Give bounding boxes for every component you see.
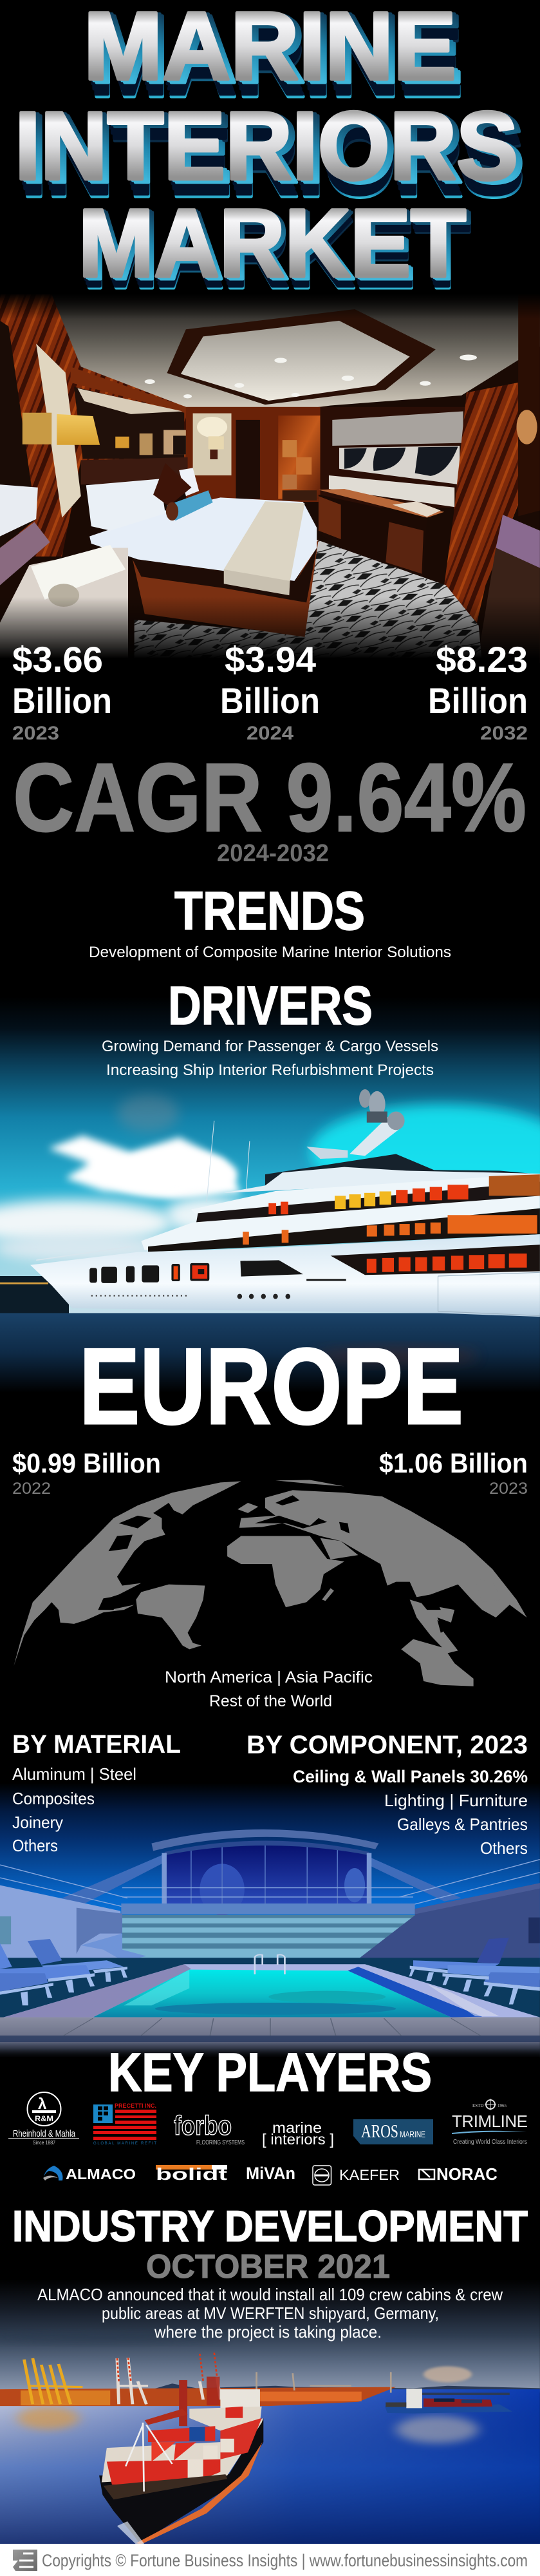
logo: Trimline: TRIMLINE — [452, 2112, 528, 2131]
stat: 2024 market size: $3.94 — [225, 639, 316, 680]
logo: Marine Interiors: [ interiors ] — [262, 2131, 334, 2148]
title line: INTERIORS: INTERIORS — [21, 106, 524, 215]
logo: Rheinhold & Mahla — [8, 2092, 79, 2146]
by component list: Others — [480, 1838, 528, 1858]
by component list: BY COMPONENT, 2023 — [247, 1731, 528, 1759]
title line: INTERIORS: INTERIORS — [19, 93, 522, 201]
stat: 2032 market size: $8.23 — [436, 639, 528, 680]
top fade band on the pool illustration — [0, 2048, 540, 2061]
driver list: Growing Demand for Passenger & Cargo Vessels — [102, 1038, 438, 1055]
Europe 2022 value — [12, 1448, 161, 1498]
stat: 2023 market size: $3.66 — [12, 639, 103, 680]
heading: TRENDS: TRENDS — [174, 881, 365, 941]
title line: MARKET: MARKET — [79, 189, 466, 297]
stat: 2024 market size — [220, 639, 320, 744]
by material list: Others — [12, 1836, 58, 1855]
by material list: Composites — [12, 1789, 95, 1808]
photo: container ships in port — [0, 2216, 540, 2544]
logo: Norac: NORAC — [436, 2164, 498, 2184]
title line: INTERIORS: INTERIORS — [17, 96, 521, 204]
lounge chairs left — [0, 1939, 127, 2005]
driver list: Increasing Ship Interior Refurbishment Projects — [106, 1062, 434, 1079]
by component list: Ceiling & Wall Panels 30.26% — [293, 1767, 528, 1786]
Europe 2023 value: 2023 — [489, 1480, 528, 1498]
lounge chairs right — [409, 1938, 540, 2005]
driver list — [102, 1038, 438, 1079]
Europe 2022 value: 2022 — [12, 1480, 51, 1498]
title line: MARKET: MARKET — [81, 196, 469, 304]
by material list: BY MATERIAL — [12, 1730, 181, 1759]
cranes — [24, 2352, 391, 2404]
stat: 2032 market size: 2032 — [480, 723, 528, 744]
main container ship — [99, 2377, 263, 2544]
logo: Precetti: PRECETTI INC. — [115, 2103, 156, 2109]
logo: Marine Interiors — [262, 2119, 334, 2148]
sea — [0, 1313, 540, 1393]
logo: Bolidt — [156, 2164, 228, 2184]
title line: MARKET: MARKET — [82, 198, 470, 307]
heading: DRIVERS: DRIVERS — [168, 975, 373, 1036]
stat: 2032 market size — [428, 639, 528, 744]
logo: Trimline — [452, 2099, 528, 2146]
heading: KEY PLAYERS: KEY PLAYERS — [108, 2042, 432, 2103]
title line: INTERIORS: INTERIORS — [21, 95, 525, 203]
yacht — [30, 1089, 540, 1317]
by material list: Joinery — [12, 1813, 63, 1832]
title line: MARKET: MARKET — [83, 200, 470, 309]
illustration: cruise ship pool deck at night — [0, 1726, 540, 2061]
logo: AROS Marine: MARINE — [400, 2129, 425, 2139]
development description: where the project is taking place. — [154, 2322, 382, 2342]
pool — [0, 1964, 540, 2018]
title line: INTERIORS: INTERIORS — [19, 101, 522, 209]
photo: yacht bedroom — [0, 294, 540, 670]
logo: AROS Marine: AROS — [361, 2122, 398, 2142]
by material list: Aluminum | Steel — [12, 1764, 136, 1784]
by component list — [247, 1731, 528, 1858]
development description: public areas at MV WERFTEN shipyard, Germany, — [102, 2304, 439, 2323]
title — [15, 0, 525, 309]
stat: 2024 market size: 2024 — [247, 723, 293, 744]
stat: 2024 market size: Billion — [220, 680, 320, 721]
trend text: Development of Composite Marine Interior Solutions — [89, 944, 451, 961]
title line: MARINE: MARINE — [90, 9, 463, 117]
logo: Trimline: 1965 — [498, 2103, 507, 2108]
stat: 2032 market size: Billion — [428, 680, 528, 721]
photo: superyacht at dusk — [0, 997, 540, 1393]
logo: Rheinhold & Mahla: Since 1887 — [33, 2140, 55, 2146]
logo: Trimline: ESTD — [472, 2103, 484, 2108]
globe map — [14, 1480, 527, 1686]
Europe 2022 value: $0.99 Billion — [12, 1448, 161, 1479]
footer logo — [13, 2550, 37, 2571]
by component list: Galleys & Pantries — [397, 1815, 528, 1834]
logo: Kaefer: KAEFER — [339, 2167, 400, 2183]
stat: 2023 market size: Billion — [12, 680, 112, 721]
title line: MARKET: MARKET — [81, 190, 469, 298]
CAGR figure: 2024-2032 — [217, 840, 329, 867]
logo: Forbo: forbo — [174, 2110, 232, 2141]
other regions list: Rest of the World — [209, 1692, 332, 1710]
logo: Mivan: MiVAn — [246, 2164, 295, 2183]
logo: Marine Interiors: marine — [272, 2119, 322, 2136]
development description: ALMACO announced that it would install all 109 crew cabins & crew — [37, 2285, 503, 2304]
logo: Bolidt: bolidt — [156, 2164, 228, 2184]
logo: Almaco: ALMACO — [66, 2166, 136, 2182]
title line: MARKET: MARKET — [80, 192, 467, 300]
footer bar — [0, 2544, 540, 2576]
title line: MARKET: MARKET — [83, 191, 470, 300]
title line: INTERIORS: INTERIORS — [21, 109, 525, 217]
title line: INTERIORS: INTERIORS — [15, 91, 518, 200]
stat: 2023 market size — [12, 639, 112, 744]
title line: MARINE: MARINE — [89, 6, 462, 115]
other regions list: North America | Asia Pacific — [165, 1668, 373, 1686]
logo: Rheinhold & Mahla: Rheinhold & Mahla — [13, 2128, 75, 2139]
other regions list — [165, 1668, 373, 1710]
logo: Precetti: GLOBAL MARINE REFIT — [93, 2142, 156, 2146]
Europe 2023 value — [379, 1448, 528, 1498]
pool ladder — [255, 1955, 284, 1974]
photo fade at top of bedroom image — [0, 293, 540, 319]
logo: Rheinhold & Mahla: R&M — [35, 2114, 53, 2123]
logo: Trimline: Creating World Class Interiors — [453, 2139, 527, 2146]
logo: Precetti — [93, 2103, 156, 2146]
logo: Forbo: FLOORING SYSTEMS — [196, 2139, 245, 2146]
Europe 2023 value: $1.06 Billion — [379, 1448, 528, 1479]
by material list — [12, 1730, 181, 1855]
stat: 2023 market size: 2023 — [12, 723, 59, 744]
logo: Rheinhold & Mahla: λ — [38, 2095, 46, 2113]
logo: Kaefer — [313, 2166, 400, 2185]
development description — [37, 2285, 503, 2342]
title line: MARINE: MARINE — [88, 1, 460, 110]
logo: AROS Marine — [353, 2119, 433, 2144]
development date: OCTOBER 2021 — [146, 2248, 390, 2285]
by component list: Lighting | Furniture — [384, 1791, 528, 1810]
heading: EUROPE: EUROPE — [79, 1326, 463, 1447]
distant container ship — [385, 2389, 512, 2414]
